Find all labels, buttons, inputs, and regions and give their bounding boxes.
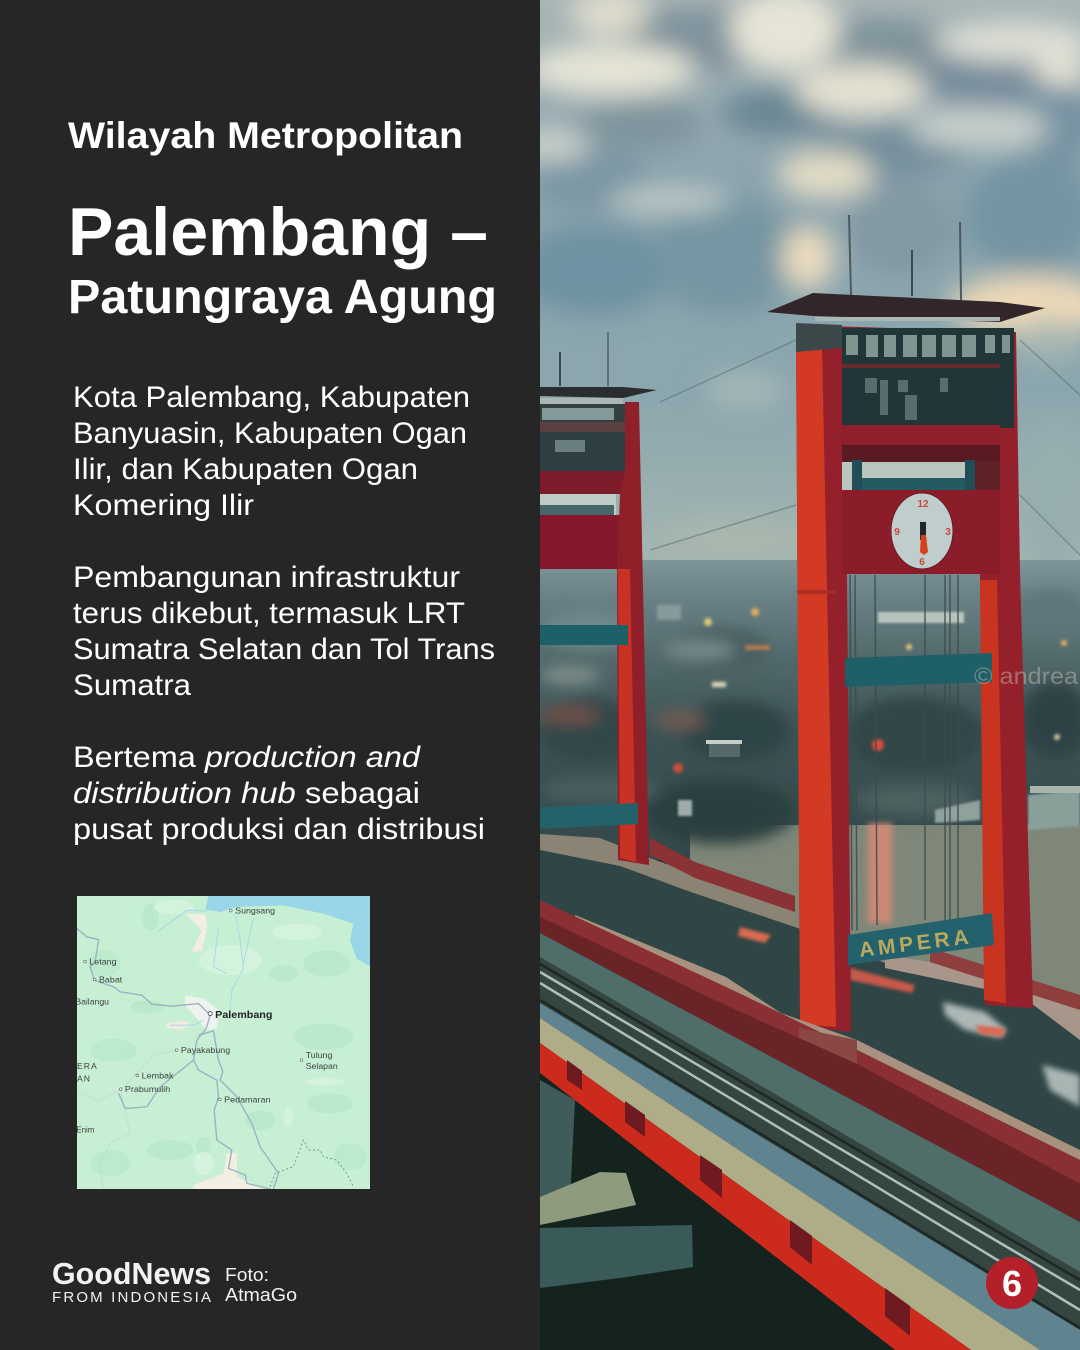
city and river background — [540, 560, 1080, 1045]
text block: theme — [73, 741, 485, 846]
map labels: Lembak — [142, 1070, 174, 1080]
map labels — [75, 906, 338, 1135]
teal cross beam — [845, 653, 992, 687]
rail fence — [540, 917, 1080, 1222]
page number badge — [986, 1257, 1038, 1309]
AMPERA sign: AMPERA — [858, 926, 970, 962]
barrier — [540, 900, 1080, 1184]
text block: regions — [73, 381, 470, 522]
text block: theme: distribution hub sebagai — [73, 777, 420, 810]
map of Palembang metropolitan area — [77, 896, 370, 1189]
map terrain patches — [87, 904, 367, 1177]
red girder — [540, 1043, 971, 1350]
AMPERA sign — [848, 913, 994, 965]
border — [270, 1140, 353, 1187]
main tower — [650, 215, 1080, 1032]
suspension cables — [650, 340, 1080, 930]
text block: infrastructure: terus dikebut, termasuk LRT — [73, 597, 465, 630]
text block: theme: Bertema production and — [73, 741, 421, 774]
dark cloud masses — [615, 8, 775, 72]
text block: regions: Kota Palembang, Kabupaten — [73, 381, 470, 414]
logo: GoodNews from Indonesia: GoodNews — [52, 1256, 211, 1291]
map labels: Payakabung — [181, 1045, 230, 1055]
bridge pier — [540, 1080, 575, 1200]
photo credit: Foto: — [225, 1265, 269, 1285]
text block: infrastructure: Pembangunan infrastruktur — [73, 561, 460, 594]
page number badge: 6 — [1002, 1263, 1022, 1304]
near sidewalk — [575, 915, 1080, 1160]
clock face: 9 — [894, 527, 900, 538]
heading: Wilayah Metropolitan: Wilayah Metropolitan — [68, 115, 463, 156]
photo credit — [225, 1265, 297, 1305]
text block: regions: Ilir, dan Kabupaten Ogan — [73, 453, 418, 486]
left tower — [540, 332, 657, 865]
main roads — [77, 929, 278, 1189]
map labels: ERA — [77, 1061, 98, 1071]
map labels: Pedamaran — [224, 1094, 271, 1104]
map labels: Babat — [99, 975, 123, 985]
text block: theme: pusat produksi dan distribusi — [73, 813, 485, 846]
text block: regions: Komering Ilir — [73, 489, 254, 522]
text block: regions: Banyuasin, Kabupaten Ogan — [73, 417, 467, 450]
left tower roof — [540, 387, 657, 398]
glass panels — [540, 1003, 1080, 1350]
text block: infrastructure: Sumatra Selatan dan Tol Trans — [73, 633, 495, 666]
clock face: 3 — [945, 527, 951, 538]
road deck — [540, 834, 1080, 1170]
photo credit: AtmaGo — [225, 1285, 297, 1305]
light cloud masses — [525, 44, 695, 96]
map labels: Sungsang — [235, 906, 275, 916]
map labels: Palembang — [215, 1010, 272, 1021]
logo: GoodNews from Indonesia — [52, 1256, 211, 1306]
far shore and houses — [855, 784, 975, 816]
map labels: Selapan — [306, 1061, 338, 1071]
cream side beam — [540, 1018, 1040, 1350]
tower plinth — [799, 1028, 857, 1064]
text block: infrastructure — [73, 561, 495, 702]
rivers — [159, 910, 253, 1025]
sky with clouds — [510, 0, 1080, 600]
clock face: 6 — [919, 557, 925, 568]
far sidewalk and wall — [540, 834, 795, 927]
roof cap — [767, 293, 1045, 322]
logo: GoodNews from Indonesia: FROM INDONESIA — [52, 1289, 211, 1306]
minor roads — [77, 1050, 177, 1189]
photo: Ampera bridge, Palembang — [540, 0, 1080, 1350]
city of Palembang area — [185, 995, 219, 1030]
map labels: Letang — [89, 957, 117, 967]
near deck of bridge — [540, 900, 1080, 1350]
clock face: 12 — [917, 499, 929, 510]
cars — [738, 927, 771, 943]
title block — [68, 115, 497, 324]
sea — [205, 896, 370, 966]
heading: Patungraya Agung: Patungraya Agung — [68, 271, 497, 324]
map labels: AN — [77, 1073, 91, 1083]
text block: infrastructure: Sumatra — [73, 669, 191, 702]
photographer watermark: © andrea — [974, 663, 1078, 689]
heading: Palembang: Palembang – — [68, 194, 488, 270]
map labels: Prabumulih — [125, 1084, 170, 1094]
teal strip — [540, 933, 1080, 1272]
map labels: Tulung — [306, 1050, 333, 1060]
clock face — [891, 493, 953, 569]
track bed — [540, 957, 1080, 1332]
